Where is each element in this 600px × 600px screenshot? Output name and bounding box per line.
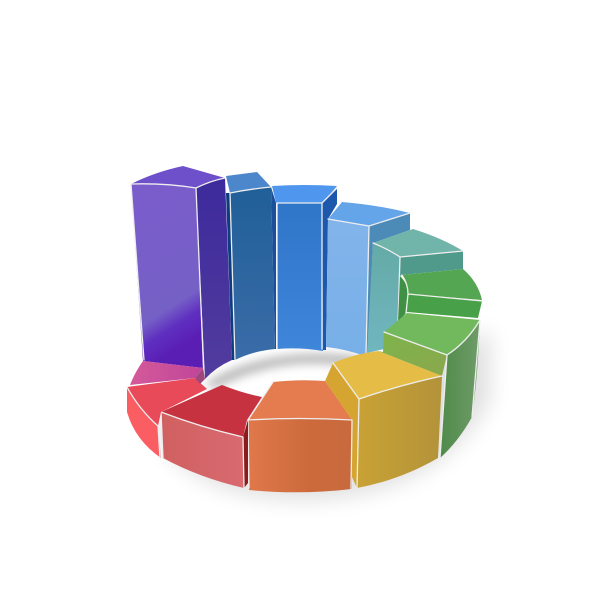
segment: blue column — [271, 185, 337, 351]
segment: violet column — [131, 166, 232, 379]
segment: crimson block — [161, 385, 262, 488]
segment: lower green step — [378, 313, 480, 458]
segment: light blue column — [326, 202, 410, 356]
inner hole shadow — [205, 354, 366, 388]
segment: yellow block — [325, 351, 442, 488]
ground shadow — [150, 330, 490, 500]
segment: magenta block — [130, 361, 205, 385]
segment: dark blue column — [226, 172, 275, 360]
segment: upper green step — [398, 269, 482, 322]
segment: teal column — [367, 229, 463, 353]
segment: red block — [127, 378, 207, 458]
segment: orange block — [248, 380, 352, 492]
